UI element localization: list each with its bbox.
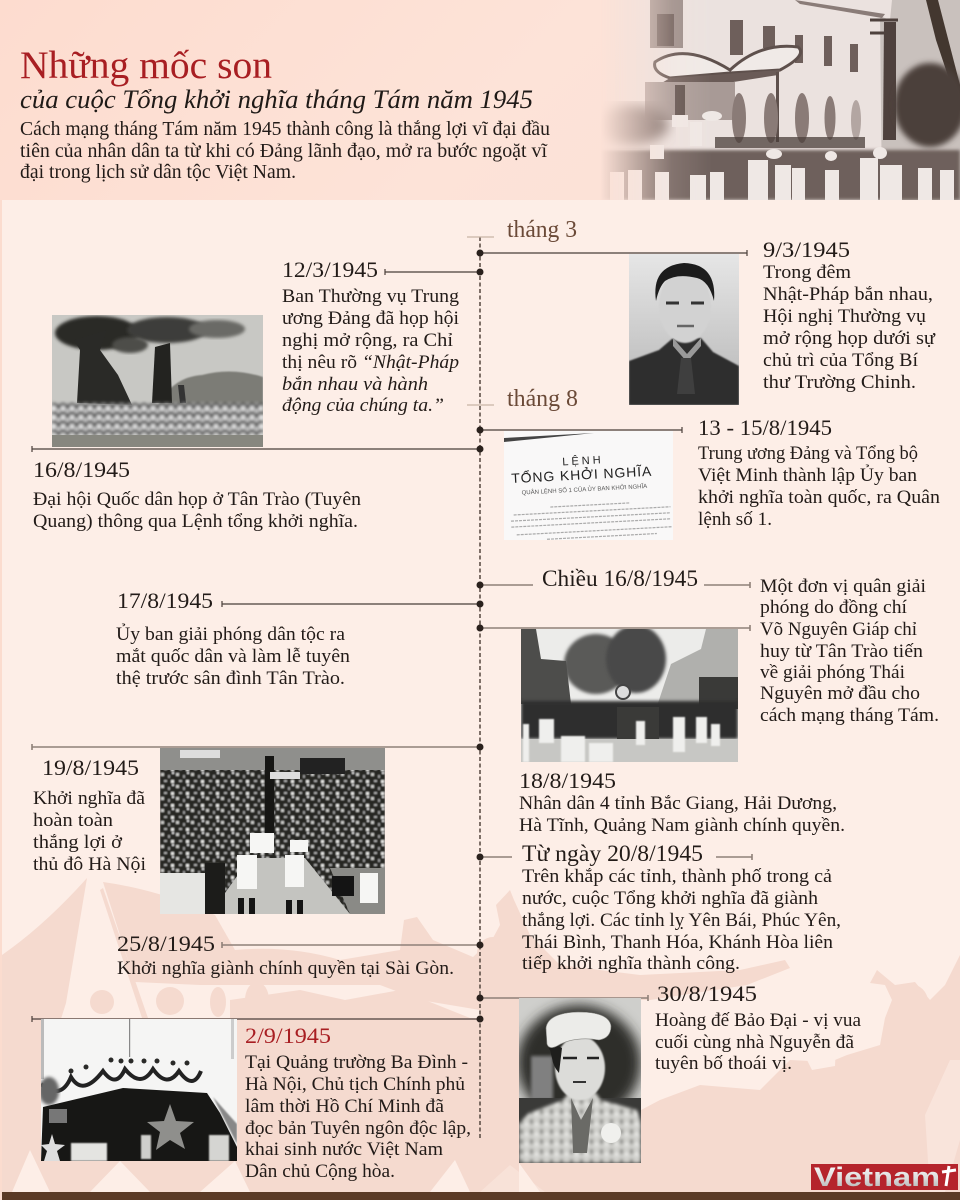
text 17/8: thệ trước sân đình Tân Trào. [116,668,345,689]
connector 20/8 [480,854,752,860]
date 12/3: 12/3/1945 [282,257,378,282]
text 16/8: Đại hội Quốc dân họp ở Tân Trào (Tuyên [33,489,362,510]
connector 2/9 [32,1016,480,1022]
date 13-15/8: 13 - 15/8/1945 [698,415,832,440]
left edge strip [0,200,2,1200]
text 12/3: thị nêu rõ [282,352,357,373]
light gaps inside the crowd silhouette [480,1045,960,1192]
text 20/8 [522,866,841,974]
event 9/3/1945 [476,237,936,393]
text chiều 16/8: cách mạng tháng Tám. [760,705,939,726]
text 12/3: ương Đảng đã họp hội [282,308,459,329]
month marker: tháng 8: tháng 8 [507,386,578,412]
text chiều 16/8: Nguyên mở đầu cho [760,683,920,704]
text 20/8: nước, cuộc Tổng khởi nghĩa đã giành [522,888,819,909]
photo: Lệnh Tổng khởi nghĩa document [504,431,673,540]
text chiều 16/8: Võ Nguyên Giáp chỉ [760,619,917,640]
connector 12/3 [385,269,480,275]
header band [0,0,960,200]
date 17/8: 17/8/1945 [117,588,213,613]
text 9/3 [763,262,936,393]
text 30/8: Hoàng đế Bảo Đại - vị vua [655,1010,862,1031]
text 12/3 [282,286,460,416]
text 25/8: Khởi nghĩa giành chính quyền tại Sài Gòn. [117,958,454,979]
text 19/8 [33,788,146,875]
text 13-15/8 [698,443,941,530]
date 30/8: 30/8/1945 [657,981,757,1006]
intro paragraph [20,118,550,183]
date 9/3: 9/3/1945 [763,237,850,262]
text 30/8: tuyên bố thoái vị. [655,1053,792,1074]
text 2/9: lâm thời Hồ Chí Minh đã [245,1096,445,1117]
connector 18/8 [480,625,750,631]
photo: banyan tree at Tân Trào [52,315,263,447]
event 25/8/1945 [117,931,484,979]
text 2/9: Tại Quảng trường Ba Đình - [245,1052,468,1073]
date 18/8: 18/8/1945 [519,768,616,793]
text 18/8: Nhân dân 4 tỉnh Bắc Giang, Hải Dương, [519,793,837,814]
bottom bar [2,1192,960,1200]
text 9/3: thư Trường Chinh. [763,372,916,393]
text 2/9 [245,1052,471,1182]
intro paragraph: đại trong lịch sử dân tộc Việt Nam. [20,161,296,183]
text 20/8: Trên khắp các tỉnh, thành phố trong cả [522,866,833,887]
text 12/3: động của chúng ta.” [282,395,444,416]
connector 9/3 [480,250,747,256]
text 13-15/8: Trung ương Đảng và Tổng bộ [698,443,918,464]
photo: Ba Đình platform 2/9/1945 [41,1019,237,1161]
event 30/8/1945 [476,981,862,1074]
date 2/9: 2/9/1945 [245,1023,331,1048]
connector 30/8 [480,995,648,1001]
photo: street crowd with truck [521,629,738,762]
text 12/3: nghị mở rộng, ra Chỉ [282,330,453,351]
text 17/8 [116,623,351,689]
intro paragraph: Cách mạng tháng Tám năm 1945 thành công là thắng lợi vĩ đại đầu [20,118,550,140]
photo: Lệnh Tổng khởi nghĩa document: TỔNG KHỞI NGHĨA [511,464,652,486]
text 20/8: thắng lợi. Các tỉnh lỵ Yên Bái, Phúc Yên, [522,910,841,931]
text 17/8: mắt quốc dân và làm lễ tuyên [116,646,351,667]
event 19/8/1945 [32,744,484,875]
event 12/3/1945 [282,257,484,416]
connector 13-15/8 [480,427,682,433]
text 2/9: khai sinh nước Việt Nam [245,1139,443,1160]
subtitle: của cuộc Tổng khởi nghĩa tháng Tám năm 1945 [20,85,533,114]
event 18/8/1945 [476,624,845,836]
date 19/8: 19/8/1945 [42,755,139,780]
month marker: tháng 3 [467,217,577,243]
event 2/9/1945 [32,1016,484,1182]
text 2/9: đọc bản Tuyên ngôn độc lập, [245,1118,471,1139]
date chiều 16/8: Chiều 16/8/1945 [542,566,698,591]
timeline axis [479,237,481,1138]
text 12/3: Ban Thường vụ Trung [282,286,460,307]
text 19/8: hoàn toàn [33,810,114,831]
event 16/8/1945 [32,446,484,532]
text 19/8: thắng lợi ở [33,832,123,853]
event từ ngày 20/8/1945 [476,841,841,974]
connector chiều 16/8 [480,582,750,588]
text 16/8 [33,489,362,532]
text 18/8: Hà Tĩnh, Quảng Nam giành chính quyền. [519,815,845,836]
date 25/8: 25/8/1945 [117,931,215,956]
month marker: tháng 3: tháng 3 [507,217,577,243]
text chiều 16/8: phóng do đồng chí [760,597,908,618]
photo: Bảo Đại portrait [519,998,641,1163]
text 19/8: Khởi nghĩa đã [33,788,146,809]
text 13-15/8: lệnh số 1. [698,509,772,530]
date 16/8: 16/8/1945 [33,457,130,482]
photo: Trường Chinh portrait [629,254,739,405]
photo: Hanoi crowd 19/8 [160,748,385,914]
text 19/8: thủ đô Hà Nội [33,854,146,875]
intro paragraph: tiên của nhân dân ta từ khi có Đảng lãnh đạo, mở ra bước ngoặt vĩ [20,140,547,162]
text 2/9: Hà Nội, Chủ tịch Chính phủ [245,1074,466,1095]
text 9/3: mở rộng họp dưới sự [763,328,936,349]
text chiều 16/8: huy từ Tân Trào tiến [760,641,924,662]
event chiều 16/8/1945 [476,566,939,726]
text 20/8: Thái Bình, Thanh Hóa, Khánh Hòa liên [522,932,834,953]
photo: Lệnh Tổng khởi nghĩa document: LỆNH [562,453,604,468]
background silhouettes: crowd with flags [2,878,960,1192]
connector 17/8 [222,601,480,607]
logo: Vietnam+: Vietnam [814,1162,940,1192]
event 13-15/8/1945 [476,415,941,530]
date 20/8: Từ ngày 20/8/1945 [522,841,703,866]
text 16/8: Quang) thông qua Lệnh tổng khởi nghĩa. [33,511,358,532]
text 9/3: chủ trì của Tổng Bí [763,350,919,371]
text chiều 16/8: Một đơn vị quân giải [760,576,926,597]
text 12/3: “Nhật-Pháp [362,352,459,373]
connector 16/8 [32,446,480,452]
text 13-15/8: khởi nghĩa toàn quốc, ra Quân [698,487,941,508]
text 9/3: Nhật-Pháp bắn nhau, [763,284,933,305]
text chiều 16/8 [760,576,939,726]
text 18/8 [519,793,845,836]
month marker: tháng 8 [467,386,578,412]
event 17/8/1945 [116,588,484,689]
text 30/8: cuối cùng nhà Nguyễn đã [655,1032,855,1053]
text 20/8: tiếp khởi nghĩa thành công. [522,953,740,974]
title: Những mốc son [20,44,272,87]
connector 19/8 [32,744,480,750]
photo: Lệnh Tổng khởi nghĩa document: QUÂN LỆNH SỐ 1 CỦA ỦY BAN KHỞI NGHĨA [521,482,647,497]
text 2/9: Dân chủ Cộng hòa. [245,1161,395,1182]
connector 25/8 [222,942,480,948]
text 13-15/8: Việt Minh thành lập Ủy ban [698,464,918,486]
text 9/3: Hội nghị Thường vụ [763,306,927,327]
header photo: crowd in front of the Hanoi palace [605,0,960,200]
text chiều 16/8: về giải phóng Thái [760,662,905,683]
text 30/8 [655,1010,862,1074]
text 17/8: Ủy ban giải phóng dân tộc ra [116,623,346,645]
text 12/3: bắn nhau và hành [282,374,428,395]
text 9/3: Trong đêm [763,262,851,283]
